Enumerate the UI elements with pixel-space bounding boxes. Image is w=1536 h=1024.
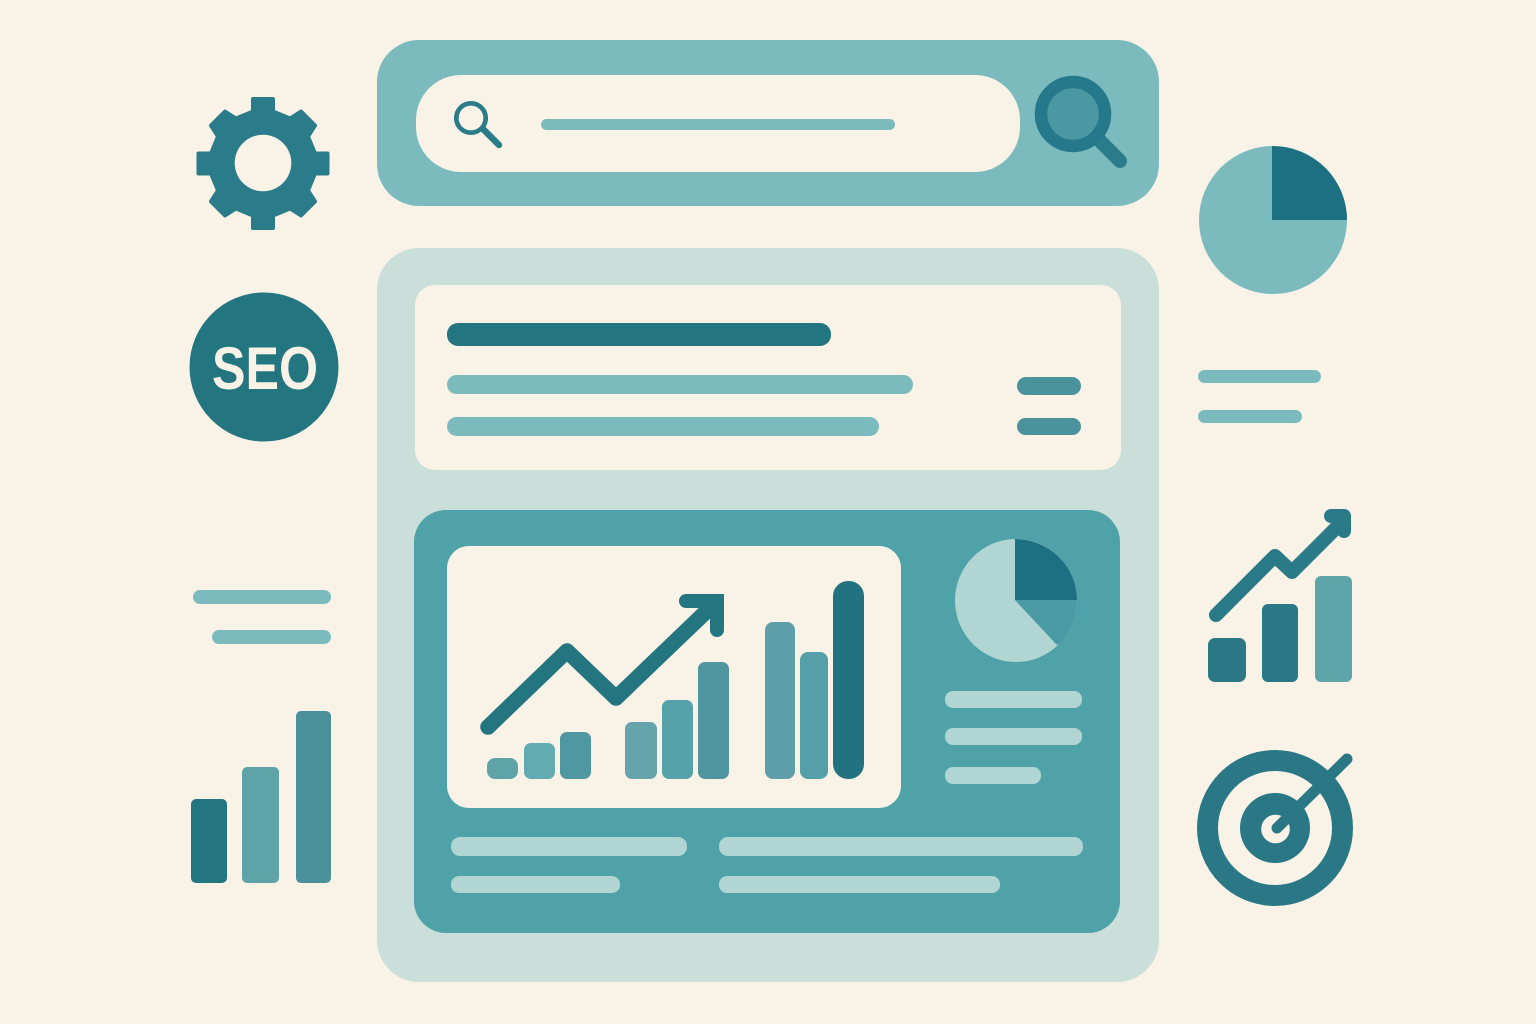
dashboard side text lines — [945, 691, 1082, 784]
target dart — [1277, 759, 1347, 828]
search input field — [416, 75, 1020, 172]
bar chart: left — [191, 711, 331, 883]
dashboard bottom text lines — [451, 837, 1083, 893]
panel: analytics dashboard — [414, 510, 1120, 933]
icon: large magnifier — [1041, 82, 1120, 161]
icon: gear — [198, 99, 328, 228]
icon: growth chart — [1208, 516, 1352, 682]
icon: SEO badge: SEO — [212, 335, 318, 402]
result description lines — [447, 375, 913, 436]
left text lines — [193, 590, 331, 644]
panel: search result card — [415, 285, 1121, 470]
result title line — [447, 323, 831, 346]
search query line — [541, 119, 895, 130]
right text lines — [1198, 370, 1321, 423]
icon: SEO badge — [190, 292, 338, 442]
pie chart: dashboard — [955, 539, 1077, 662]
icon: small magnifier — [456, 103, 499, 145]
panel: results page — [377, 248, 1159, 982]
bar chart: second group — [625, 662, 729, 779]
bar chart: first group — [487, 732, 591, 779]
panel: chart card — [447, 546, 901, 808]
icon: target — [1208, 759, 1347, 896]
result side tags — [1017, 377, 1081, 435]
growth arrow — [1216, 516, 1344, 615]
pie chart: right — [1199, 146, 1347, 294]
panel: search bar — [377, 40, 1159, 206]
trend arrow — [488, 601, 717, 727]
bar chart: third group — [765, 581, 864, 779]
